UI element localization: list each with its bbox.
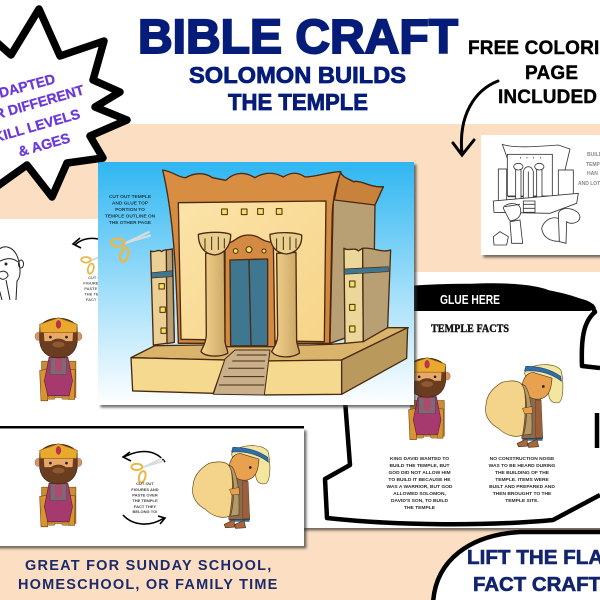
cut instructions: THE TEMPLE bbox=[132, 498, 158, 503]
cut instructions bbox=[131, 481, 159, 514]
construction noise fact: WAS TO BE HEARD DURING bbox=[489, 463, 556, 469]
cut instructions: PASTE OVER bbox=[132, 492, 158, 498]
audience caption bbox=[18, 558, 278, 593]
worker figure bbox=[485, 365, 563, 447]
coloring page preview: AND LOT bbox=[578, 181, 600, 187]
king figure bbox=[35, 318, 82, 401]
starburst badge bbox=[0, 9, 127, 197]
audience caption: GREAT FOR SUNDAY SCHOOL, bbox=[25, 558, 272, 574]
construction noise fact: TEMPLE. ITEMS WERE bbox=[495, 477, 549, 483]
king figure bbox=[404, 358, 450, 440]
title: BIBLE CRAFT bbox=[138, 11, 458, 64]
cut out temple instructions: AND GLUE TOP bbox=[112, 200, 149, 206]
lift the flap badge bbox=[433, 532, 600, 600]
curved arrow to coloring page bbox=[453, 81, 498, 155]
king figure bbox=[35, 444, 82, 527]
arrow: top bbox=[123, 452, 165, 462]
coloring page preview: HAN bbox=[587, 171, 598, 177]
coloring page preview: TEMP bbox=[586, 162, 600, 168]
worker figure bbox=[192, 446, 270, 528]
cut instructions: FACT THEY bbox=[86, 297, 108, 302]
subtitle bbox=[189, 62, 406, 115]
cut instructions: BELONG TO! bbox=[132, 509, 158, 514]
king david fact: THE TEMPLE bbox=[404, 505, 436, 511]
cut out temple instructions: CUT OUT TEMPLE bbox=[109, 194, 152, 200]
upper left sheet bbox=[0, 219, 304, 428]
cut out temple instructions: TEMPLE OUTLINE ON bbox=[105, 214, 156, 220]
temple image bbox=[98, 162, 414, 405]
cut instructions: THE TEMPLE bbox=[84, 292, 110, 296]
free coloring page note: PAGE bbox=[525, 63, 578, 84]
cut out temple instructions: THE OTHER PAGE bbox=[109, 220, 152, 226]
line art figure bbox=[0, 247, 24, 300]
construction noise fact: NO CONSTRUCTION NOISE bbox=[490, 456, 555, 462]
audience caption: HOMESCHOOL, OR FAMILY TIME bbox=[18, 577, 278, 593]
facts sheet bbox=[300, 272, 600, 528]
king david fact: KING DAVID WANTED TO bbox=[390, 456, 449, 462]
badge text bbox=[0, 70, 86, 160]
arrow: bottom bbox=[123, 515, 165, 524]
curved arrow bbox=[73, 238, 98, 248]
subtitle: THE TEMPLE bbox=[228, 89, 368, 115]
king david fact: WAS A WARRIOR, BUT GOD bbox=[387, 484, 453, 490]
badge text: & AGES bbox=[16, 130, 72, 160]
peach background band bbox=[0, 124, 600, 600]
scissors bbox=[81, 252, 110, 274]
king david fact: ALLOWED SOLOMON, bbox=[393, 491, 446, 497]
construction noise fact: BUILT AND PREPARED AND bbox=[489, 484, 555, 490]
king david fact bbox=[387, 456, 453, 511]
king david fact: GOD DID NOT ALLOW HIM bbox=[388, 470, 451, 476]
subtitle: SOLOMON BUILDS bbox=[189, 62, 406, 88]
cut instructions: CUT OUT bbox=[136, 481, 154, 486]
construction noise fact: THE BUILDING OF THE bbox=[495, 470, 550, 476]
construction noise fact: THEN BROUGHT TO THE bbox=[493, 491, 552, 497]
temple facts heading: TEMPLE FACTS bbox=[431, 321, 509, 335]
glue here label: GLUE HERE bbox=[440, 293, 500, 307]
lift the flap badge: FACT CRAFT bbox=[473, 574, 600, 596]
cut instructions: FACT THEY bbox=[134, 504, 156, 509]
construction noise fact bbox=[489, 456, 556, 504]
scissors bbox=[131, 458, 164, 483]
cut instructions: CUT OUT bbox=[88, 275, 106, 280]
king david fact: DAVID'S SON, TO BUILD bbox=[391, 498, 448, 504]
king david fact: BUILD THE TEMPLE, BUT bbox=[389, 463, 450, 469]
cut instructions: PASTE OVER bbox=[84, 286, 110, 291]
construction noise fact: TEMPLE SITE. bbox=[505, 498, 539, 504]
cut out temple instructions bbox=[105, 194, 156, 226]
cut instructions: FIGURES AND bbox=[83, 280, 111, 286]
scissors bbox=[111, 232, 151, 263]
cut out temple instructions: PORTION TO bbox=[115, 207, 145, 213]
cut instructions bbox=[83, 275, 111, 302]
lower left sheet bbox=[0, 426, 304, 546]
king david fact: TO BUILD IT BECAUSE HE bbox=[388, 477, 451, 483]
free coloring page note bbox=[468, 38, 600, 108]
cut instructions: FIGURES AND bbox=[131, 487, 159, 492]
flap outline bbox=[325, 286, 600, 524]
temple illustration bbox=[131, 170, 408, 395]
glue band bbox=[400, 283, 596, 311]
coloring page preview bbox=[481, 135, 600, 255]
free coloring page note: INCLUDED bbox=[498, 87, 597, 108]
